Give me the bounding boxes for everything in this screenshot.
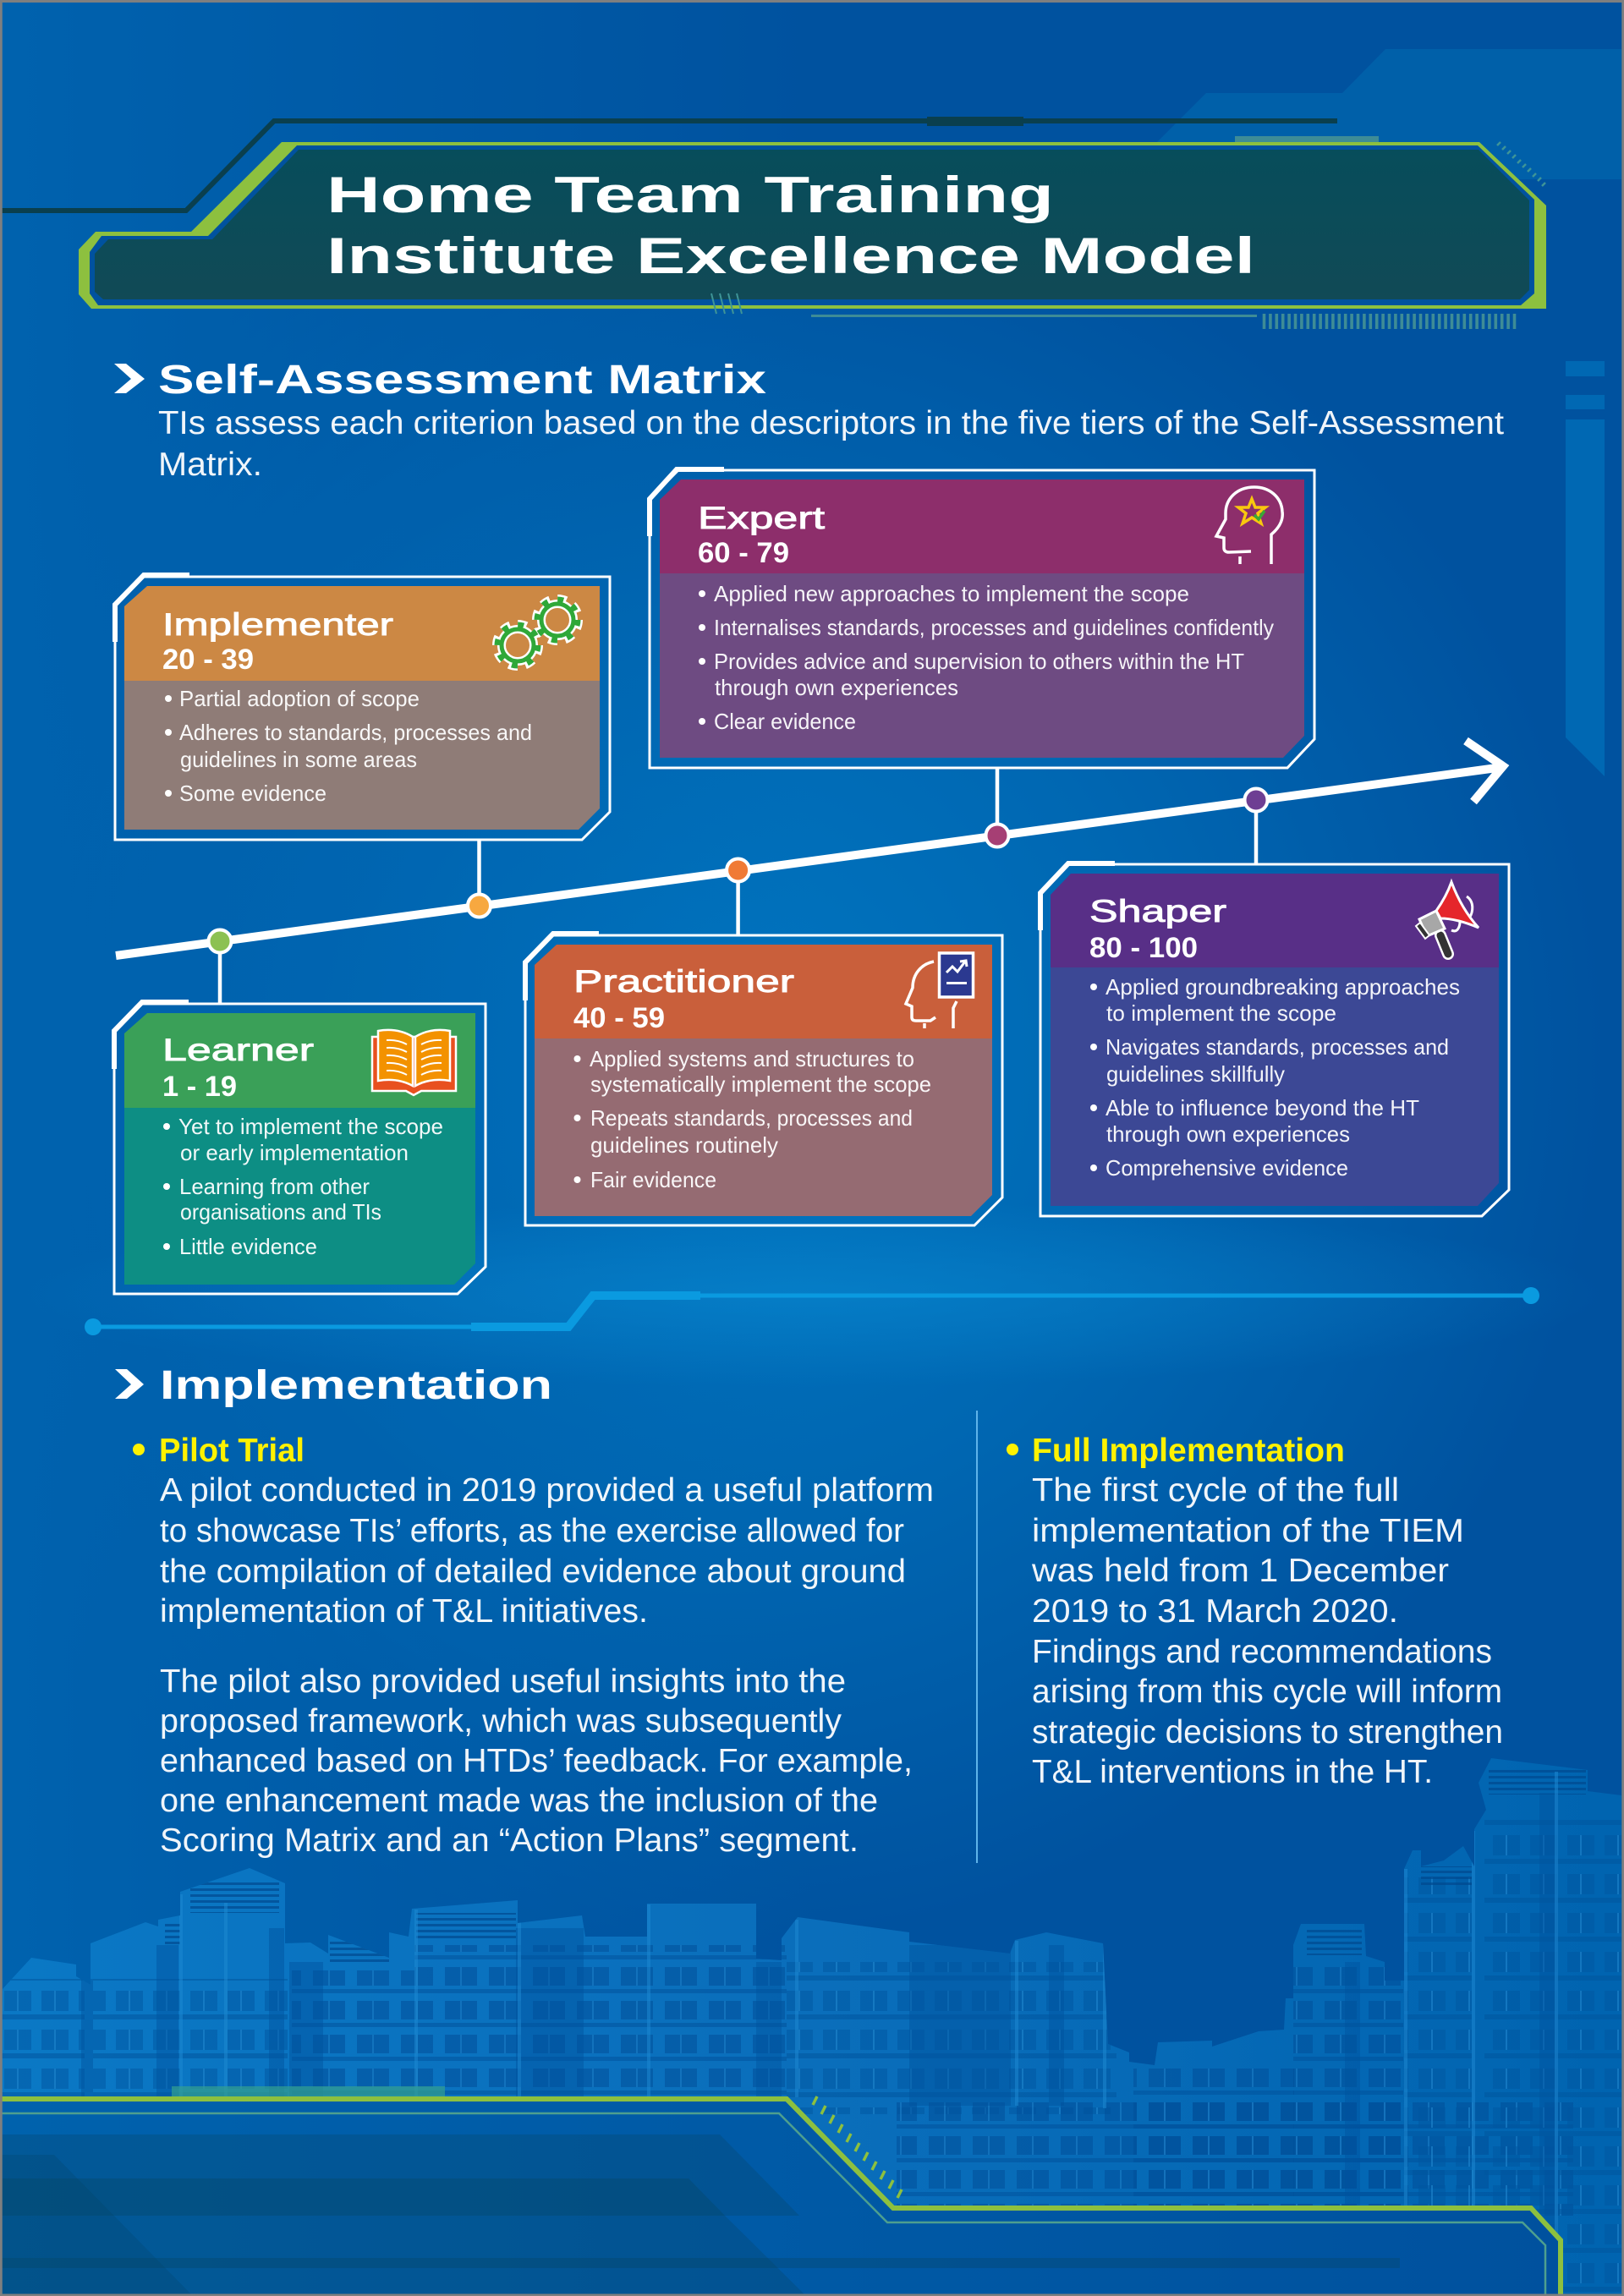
panel: Implementer: [115, 575, 610, 840]
descriptors: [573, 1046, 931, 1192]
descriptors: guidelines skillfully: [1106, 1061, 1285, 1087]
descriptors: Internalises standards, processes and guidelines confidently: [714, 615, 1274, 640]
descriptors: Applied systems and structures to: [590, 1046, 914, 1071]
panel: Learner: Learner: [162, 1033, 314, 1067]
timeline arrow: [116, 741, 1503, 956]
background shape: right side bars: [1566, 361, 1605, 776]
banner slashes: [711, 293, 742, 314]
panel: Expert: Expert: [698, 501, 826, 535]
descriptors: organisations and TIs: [180, 1199, 381, 1225]
section heading: Implementation: [115, 1363, 552, 1408]
timeline dots: [208, 788, 1267, 952]
descriptors: [165, 686, 532, 806]
column: Pilot Trial: implementation of T&L initiatives.: [160, 1593, 648, 1630]
column: Pilot Trial: Pilot Trial: [159, 1433, 304, 1469]
bottom frame panel: [0, 2099, 1559, 2296]
descriptors: Comprehensive evidence: [1106, 1155, 1348, 1181]
descriptors: Clear evidence: [714, 709, 856, 734]
title text: [326, 167, 1255, 284]
descriptors: Yet to implement the scope: [178, 1114, 443, 1139]
column: Pilot Trial: The pilot also provided useful insights into the: [160, 1663, 846, 1700]
icon: megaphone: [1416, 882, 1479, 954]
column: Pilot Trial: enhanced based on HTDs’ feedback. For example,: [160, 1743, 913, 1779]
column: Pilot Trial: to showcase TIs’ efforts, as the exercise allowed for: [160, 1513, 904, 1549]
descriptors: Fair evidence: [590, 1167, 716, 1192]
descriptors: to implement the scope: [1106, 1000, 1336, 1026]
descriptors: Able to influence beyond the HT: [1106, 1095, 1419, 1121]
panel: Practitioner: 40 - 59: [573, 1002, 665, 1034]
descriptors: Repeats standards, processes and: [590, 1105, 913, 1131]
section heading: Self-Assessment Matrix: Self-Assessment Matrix: [158, 358, 766, 403]
panel: Practitioner: [525, 934, 1002, 1225]
connectors: [220, 768, 1256, 1004]
icon: gears: [497, 600, 578, 666]
descriptors: Applied new approaches to implement the scope: [714, 581, 1189, 606]
descriptors: guidelines in some areas: [180, 747, 417, 772]
panel: Shaper: 80 - 100: [1089, 932, 1198, 964]
icon: head with star: [1216, 487, 1282, 564]
title text: Home Team Training: [326, 167, 1054, 223]
panel: Learner: 1 - 19: [162, 1071, 237, 1103]
bottom green frame line: [0, 2099, 1561, 2296]
descriptors: Adheres to standards, processes and: [179, 720, 532, 745]
intro text: TIs assess each criterion based on the descriptors in the five tiers of the Self-Assessment: [158, 405, 1504, 441]
descriptors: Some evidence: [179, 781, 326, 806]
bottom dark shapes: [0, 2134, 1400, 2294]
column: Full Implementation: The first cycle of the full: [1032, 1472, 1399, 1509]
column: Pilot Trial: [133, 1433, 934, 1859]
column: Full Implementation: was held from 1 December: [1031, 1553, 1449, 1589]
descriptors: or early implementation: [180, 1140, 409, 1165]
bottom thin line: [0, 2113, 1545, 2296]
intro text: Matrix.: [158, 447, 262, 483]
column: Pilot Trial: Scoring Matrix and an “Action Plans” segment.: [160, 1822, 859, 1859]
column: Pilot Trial: one enhancement made was the inclusion of the: [160, 1783, 878, 1819]
title banner: [79, 142, 1546, 309]
panel: Expert: [650, 469, 1314, 768]
panel: Implementer: 20 - 39: [162, 644, 254, 676]
panel: Expert: 60 - 79: [698, 537, 789, 569]
descriptors: systematically implement the scope: [590, 1071, 931, 1097]
column: Full Implementation: strategic decisions to strengthen: [1032, 1714, 1503, 1751]
descriptors: Provides advice and supervision to others within the HT: [714, 649, 1244, 674]
bottom teal tab: [172, 2086, 445, 2097]
descriptors: Applied groundbreaking approaches: [1106, 974, 1460, 1000]
panel: Shaper: Shaper: [1089, 894, 1226, 929]
column: Full Implementation: arising from this cycle will inform: [1032, 1674, 1502, 1710]
descriptors: [163, 1114, 443, 1259]
panel: Practitioner: Practitioner: [573, 964, 794, 999]
panel: Shaper: [1040, 863, 1509, 1216]
descriptors: [699, 581, 1274, 734]
column: Pilot Trial: A pilot conducted in 2019 provided a useful platform: [160, 1472, 934, 1509]
descriptors: [1090, 974, 1460, 1181]
descriptors: through own experiences: [715, 675, 958, 700]
circuit divider line: [85, 1287, 1539, 1335]
icon: book: [372, 1030, 456, 1095]
title text: Institute Excellence Model: [326, 227, 1255, 284]
header teal tab: [1235, 136, 1379, 142]
header circuit line: [0, 117, 1337, 211]
panel: Learner: [114, 1002, 486, 1294]
descriptors: Little evidence: [179, 1234, 317, 1259]
column: Full Implementation: Full Implementation: [1032, 1433, 1345, 1469]
column: Full Implementation: T&L interventions in the HT.: [1032, 1754, 1433, 1790]
descriptors: Partial adoption of scope: [179, 686, 420, 711]
bottom dashes: [813, 2096, 902, 2198]
column: Full Implementation: [1007, 1433, 1503, 1790]
skyline illustration: [0, 1758, 1624, 2296]
descriptors: Navigates standards, processes and: [1106, 1034, 1449, 1060]
column: Full Implementation: 2019 to 31 March 2020.: [1032, 1593, 1398, 1630]
banner under-line and ticks: [811, 314, 1514, 329]
column: Pilot Trial: proposed framework, which was subsequently: [160, 1703, 842, 1740]
column divider: [976, 1411, 978, 1863]
background shape: top right panel: [1149, 49, 1621, 179]
icon: head with chart: [906, 953, 973, 1028]
intro text: [158, 405, 1504, 483]
column: Pilot Trial: the compilation of detailed evidence about ground: [160, 1553, 906, 1590]
header dashes: [1497, 142, 1545, 186]
descriptors: Learning from other: [179, 1174, 370, 1199]
descriptors: through own experiences: [1106, 1121, 1350, 1147]
section heading: Implementation: Implementation: [160, 1363, 552, 1408]
descriptors: guidelines routinely: [590, 1132, 778, 1158]
column: Full Implementation: implementation of the TIEM: [1032, 1513, 1464, 1549]
column: Full Implementation: Findings and recommendations: [1032, 1634, 1492, 1670]
panel: Implementer: Implementer: [162, 607, 393, 642]
